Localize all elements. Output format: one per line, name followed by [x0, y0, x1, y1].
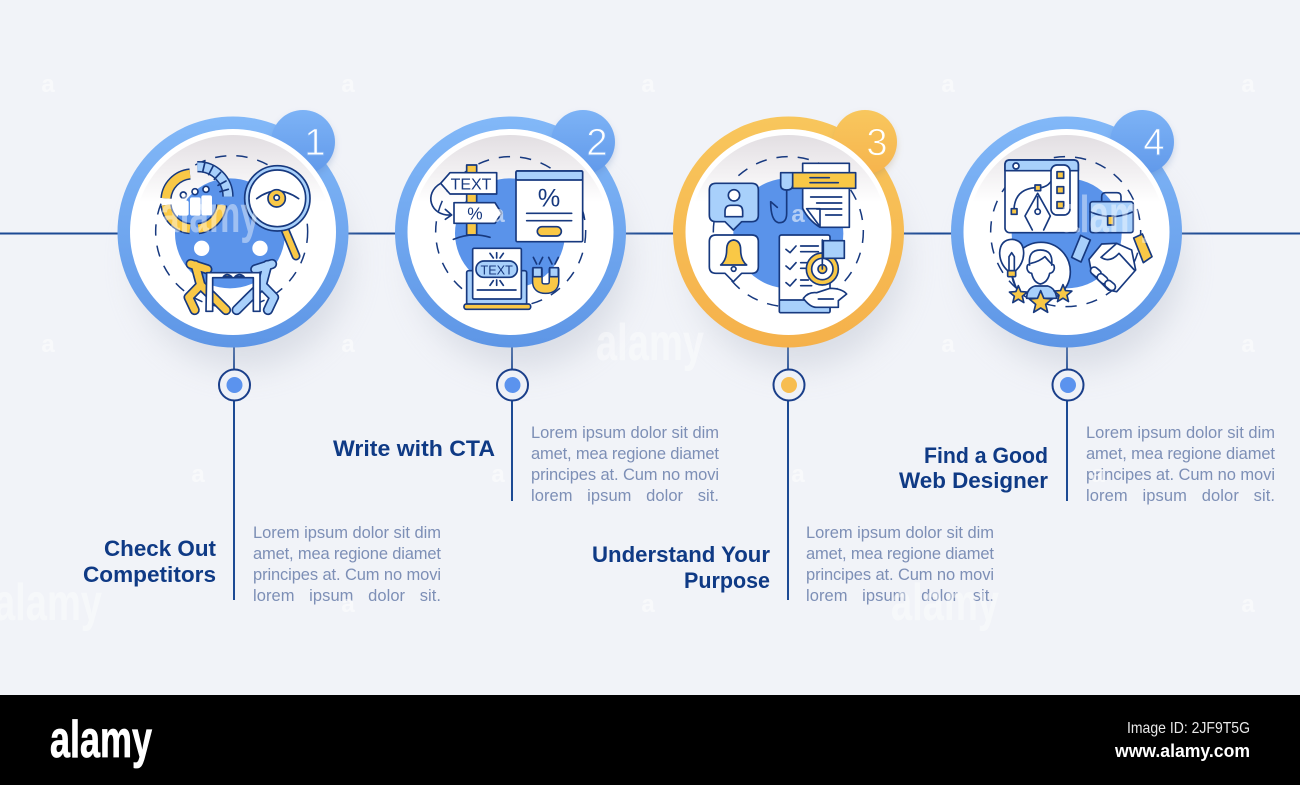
step 4 vertical connector [1066, 345, 1068, 501]
watermarks: a [491, 461, 505, 488]
watermarks: a [1241, 331, 1255, 358]
designer with stars [1009, 242, 1072, 312]
step 3 marker dot [774, 370, 804, 400]
icon: call to action [431, 157, 586, 309]
number badge [551, 110, 615, 177]
heading: step 2: Write with CTA [333, 436, 495, 461]
body text: step 1: Lorem ipsum dolor sit dim [253, 524, 441, 542]
body text: step 4: lorem ipsum dolor sit. [1086, 487, 1275, 505]
ring [673, 116, 904, 348]
watermarks: a [941, 331, 955, 358]
body text: step 3: lorem ipsum dolor sit. [806, 587, 994, 605]
watermarks: a [341, 71, 355, 98]
watermarks: a [1241, 71, 1255, 98]
watermarks: a [1091, 461, 1105, 488]
shadow [415, 156, 627, 368]
laptop with text [464, 248, 531, 309]
heading: step 3: Understand Your [592, 542, 770, 567]
group of people [178, 186, 212, 216]
magnifying glass with eye [245, 166, 310, 256]
ring [395, 116, 626, 348]
body text: step 1 [253, 524, 441, 605]
watermarks: alamy [596, 314, 704, 372]
number badge: 4 [1143, 122, 1165, 164]
watermarks: a [341, 591, 355, 618]
laptop with text: TEXT [480, 264, 513, 278]
body text: step 3: Lorem ipsum dolor sit dim [806, 524, 994, 542]
step 1 marker dot [219, 370, 250, 400]
watermarks: a [491, 201, 505, 228]
heading: step 1 [83, 536, 217, 587]
signpost: TEXT [451, 177, 492, 194]
shadow [692, 156, 904, 368]
icon: web designer [991, 157, 1152, 312]
watermarks [0, 71, 1255, 632]
signpost [431, 165, 502, 239]
number badge [1110, 110, 1174, 177]
step 1 vertical connector [233, 345, 235, 600]
body text: step 1: lorem ipsum dolor sit. [253, 587, 441, 605]
magnet [533, 257, 558, 289]
panel: step 3 circle [673, 110, 904, 368]
site url: www.alamy.com [1114, 741, 1250, 761]
watermarks: a [1241, 591, 1255, 618]
body text: step 4: principes at. Cum no movi [1086, 466, 1275, 484]
heading: step 4 [899, 443, 1048, 493]
body text: step 2: Lorem ipsum dolor sit dim [531, 424, 719, 442]
watermarks: a [791, 461, 805, 488]
footer logo: alamy [50, 711, 152, 769]
inner disc [130, 129, 336, 335]
icon: competitors analysis [156, 156, 310, 311]
shadow [137, 156, 349, 368]
watermarks: alamy [1060, 186, 1160, 244]
image id: Image ID: 2JF9T5G [1127, 720, 1250, 737]
discount window [516, 171, 583, 242]
body text: step 3: amet, mea regione diamet [806, 545, 994, 563]
body text: step 4: amet, mea regione diamet [1086, 445, 1275, 463]
bulb [1000, 239, 1024, 287]
panel: step 1 circle [118, 110, 349, 368]
ring [951, 116, 1182, 348]
icon: understand purpose [709, 157, 863, 313]
shadow [970, 156, 1182, 368]
panel: step 2 circle [395, 110, 627, 368]
body text: step 3: principes at. Cum no movi [806, 566, 994, 584]
inner disc [408, 129, 614, 335]
body text: step 2: lorem ipsum dolor sit. [531, 487, 719, 505]
design window [1005, 160, 1078, 233]
panel: step 4 circle [951, 110, 1182, 368]
discount window: % [538, 185, 560, 213]
body text: step 4: Lorem ipsum dolor sit dim [1086, 424, 1275, 442]
handshake [1072, 234, 1152, 292]
body text: step 3 [806, 524, 994, 605]
phone with checklist and target [779, 235, 847, 313]
heading: step 4: Find a Good [924, 443, 1048, 468]
bell bubble [709, 235, 758, 282]
signpost: % [467, 203, 483, 223]
watermarks: a [41, 331, 55, 358]
body text: step 1: amet, mea regione diamet [253, 545, 441, 563]
watermarks: a [641, 591, 655, 618]
inner disc [686, 129, 892, 335]
inner disc [964, 129, 1170, 335]
watermarks: a [341, 331, 355, 358]
watermarks: alamy [891, 574, 999, 632]
body text: step 1: principes at. Cum no movi [253, 566, 441, 584]
step 3 vertical connector [787, 345, 789, 600]
body text: step 2: principes at. Cum no movi [531, 466, 719, 484]
step 2 marker dot [497, 370, 528, 400]
heading: step 1: Check Out [104, 536, 217, 561]
heading: step 4: Web Designer [899, 468, 1048, 493]
number badge: 1 [304, 122, 326, 164]
heading: step 1: Competitors [83, 562, 216, 587]
number badge [833, 110, 897, 177]
step 2 vertical connector [511, 345, 513, 501]
number badge: 3 [866, 122, 888, 164]
horizontal timeline [0, 232, 1300, 234]
watermarks: a [191, 461, 205, 488]
ring [118, 116, 348, 348]
body text: step 2: amet, mea regione diamet [531, 445, 719, 463]
number badge: 2 [586, 122, 608, 164]
watermarks: alamy [160, 186, 260, 244]
heading: step 3 [592, 542, 770, 593]
briefcase [1090, 193, 1133, 233]
watermarks: a [41, 71, 55, 98]
watermarks: a [641, 71, 655, 98]
body text: step 4 [1086, 424, 1275, 505]
watermarks: a [941, 71, 955, 98]
number badge [271, 110, 335, 177]
body text: step 2 [531, 424, 719, 505]
hook and headline document [771, 163, 856, 227]
footer bar [0, 695, 1300, 785]
heading: step 3: Purpose [684, 568, 770, 593]
person bubble [709, 183, 758, 230]
watermarks: a [791, 201, 805, 228]
step 4 marker dot [1052, 370, 1084, 400]
two people at table [189, 241, 274, 311]
chart arcs [166, 162, 228, 229]
